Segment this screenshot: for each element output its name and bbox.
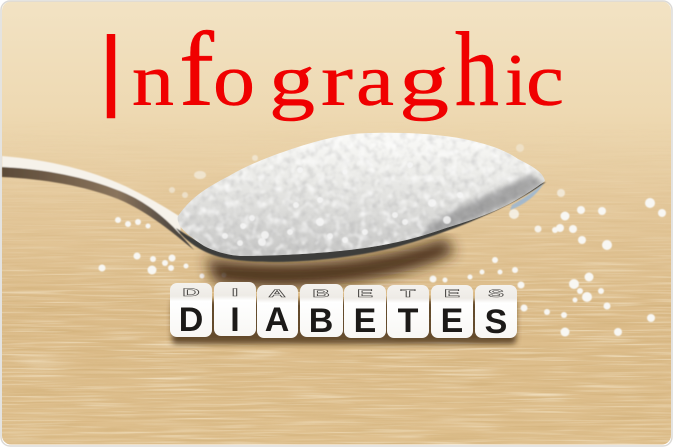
block top letters: [182, 286, 504, 299]
title: c: [526, 40, 564, 122]
shadow under spoon: [205, 238, 455, 287]
block front letters: B: [309, 302, 333, 340]
title: f: [179, 11, 215, 128]
spoon bowl rim: [176, 182, 546, 262]
sugar mound: [178, 133, 545, 256]
block top letters: E: [357, 287, 373, 299]
block top letters: I: [232, 286, 238, 298]
title: g: [269, 40, 315, 122]
block front letters: S: [485, 303, 507, 341]
block front letters: I: [230, 301, 240, 339]
title: g: [399, 40, 449, 122]
block top letters: D: [182, 286, 200, 298]
spilled sugar grains: [98, 144, 666, 336]
title: h: [455, 11, 499, 128]
sugar texture: [170, 130, 550, 260]
spoon with sugar: [2, 130, 550, 262]
letter blocks spelling DIABETES: [170, 282, 517, 344]
block front letters: E: [354, 302, 376, 340]
block top letters: A: [268, 287, 286, 299]
block top letters: B: [312, 287, 330, 299]
blocks: [170, 282, 517, 338]
block front letters: T: [398, 302, 419, 340]
blue tip highlight: [510, 183, 544, 210]
block top letters: E: [444, 287, 460, 299]
block front letters: A: [265, 301, 289, 339]
title: I: [99, 8, 123, 144]
block front letters: E: [441, 302, 463, 340]
title: n: [132, 40, 174, 122]
title: i: [505, 40, 527, 122]
title: r: [321, 40, 353, 122]
block top letters: T: [401, 287, 416, 299]
block front letters: [179, 301, 507, 341]
spoon handle: [2, 156, 194, 250]
block front letters: D: [179, 301, 203, 339]
title: a: [356, 40, 394, 122]
title: o: [213, 40, 255, 122]
blocks shadow: [172, 300, 516, 344]
block top letters: S: [488, 287, 504, 299]
